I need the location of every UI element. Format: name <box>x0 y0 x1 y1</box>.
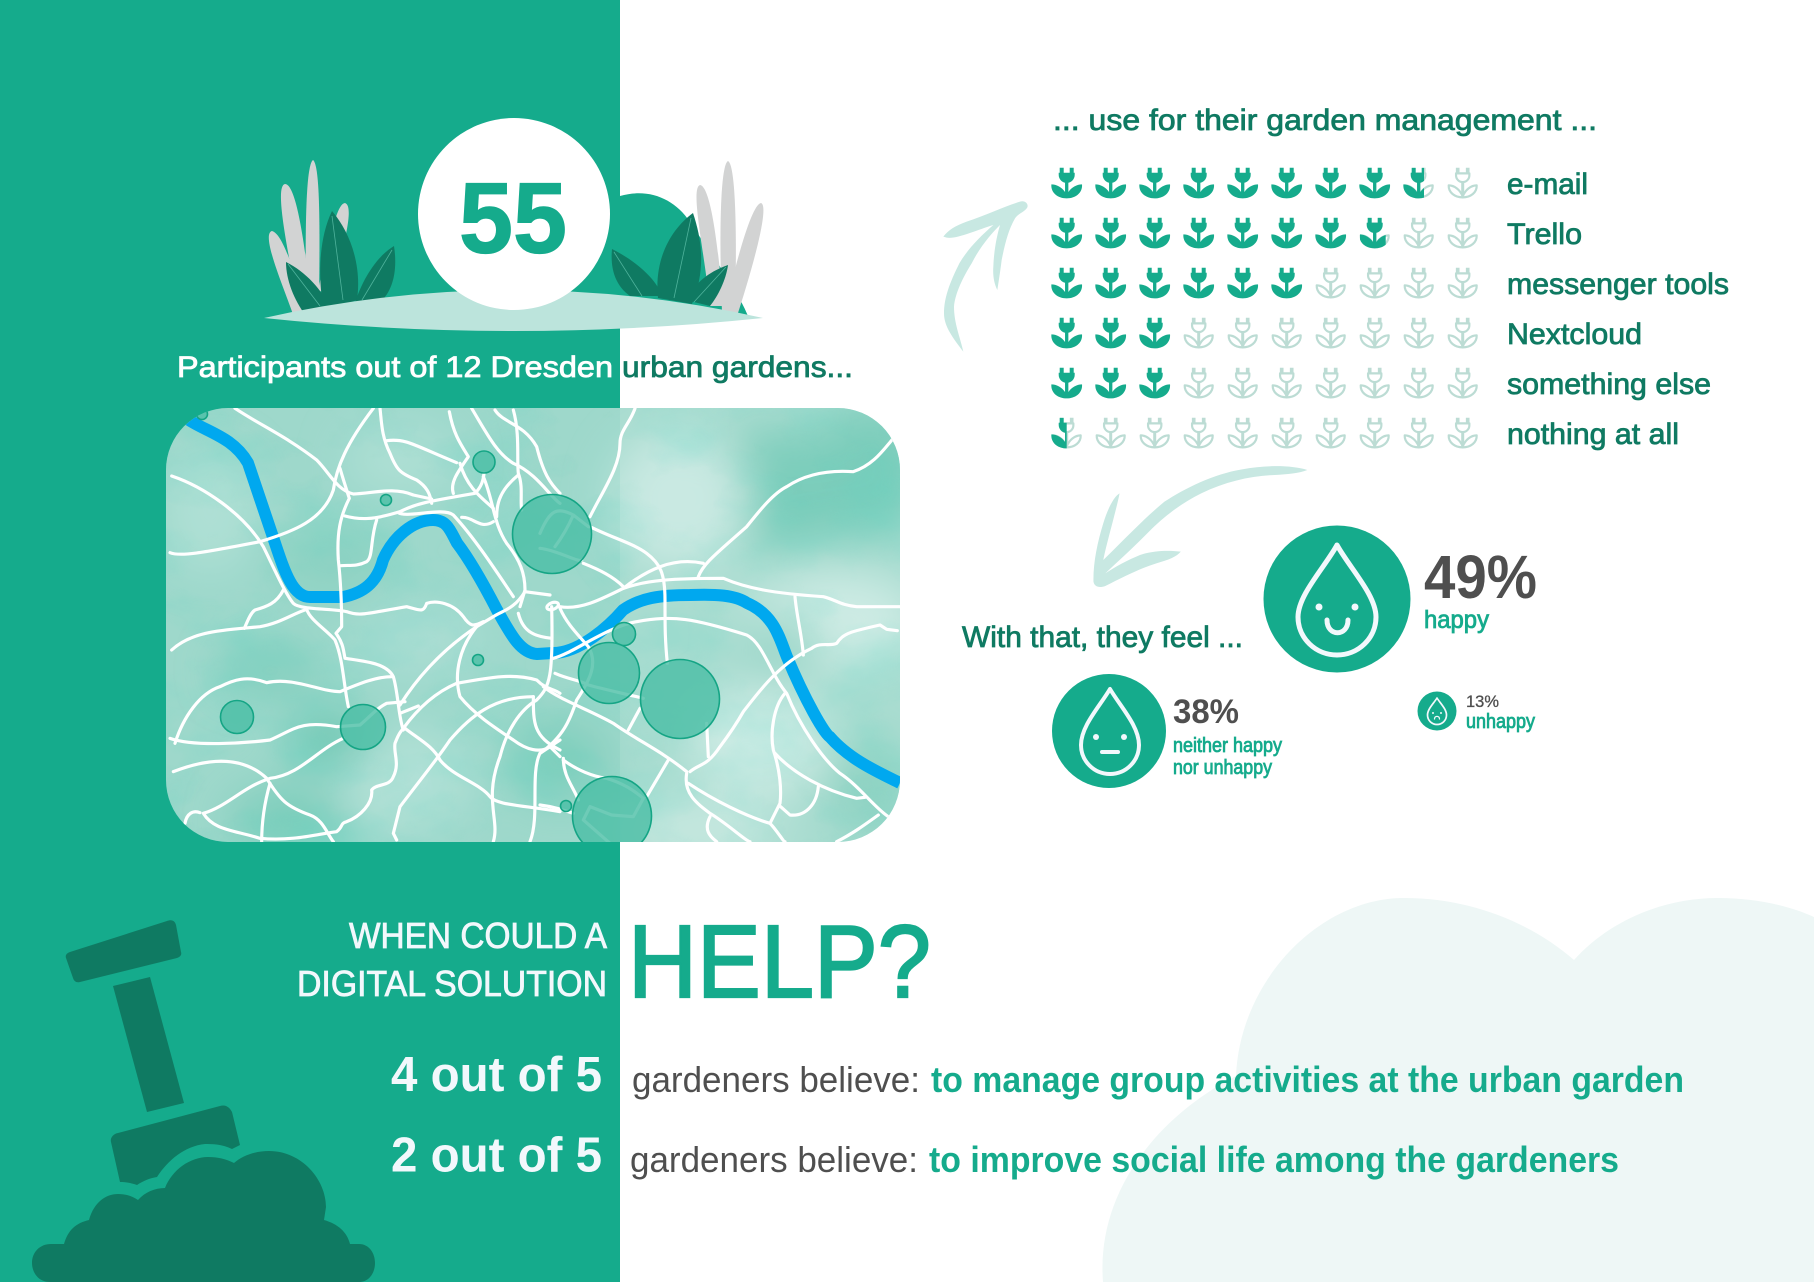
pictogram row: nothing at all <box>1051 418 1477 448</box>
unhappy statistic: unhappy <box>1466 711 1535 733</box>
arrow: up towards tools <box>943 201 1028 352</box>
map of Dresden <box>165 400 930 860</box>
happy statistic: 49% <box>1424 543 1537 611</box>
title: when could a digital solution help: WHEN COULD A <box>349 915 607 956</box>
finding: social life: 2 out of 5 <box>391 1128 602 1182</box>
finding: social life: to improve social life among the gardeners <box>929 1139 1619 1180</box>
shovel blade <box>111 1105 240 1185</box>
pictogram row: something else <box>1051 368 1477 398</box>
finding: group activities: 4 out of 5 <box>391 1048 602 1102</box>
tool labels <box>1507 168 1729 451</box>
pictogram row: e-mail <box>1051 168 1477 198</box>
background cloud shape <box>1102 898 1814 1282</box>
shovel grip <box>66 920 181 982</box>
roads west <box>170 408 560 842</box>
unhappy statistic: 13% <box>1466 692 1499 711</box>
arrow: down towards feelings <box>1093 466 1307 587</box>
finding: group activities: gardeners believe: <box>632 1059 920 1100</box>
panel: green left column <box>0 0 620 1282</box>
illustration: plants and participant badge <box>264 118 763 331</box>
heading: participants: Participants out of 12 Dresden <box>177 351 613 384</box>
title: when could a digital solution help <box>297 904 931 1019</box>
tool labels: something else <box>1507 368 1711 401</box>
tool labels: Nextcloud <box>1507 318 1642 351</box>
finding: social life <box>391 1128 1619 1182</box>
garden location circles <box>196 408 720 856</box>
ground <box>264 290 763 331</box>
heading: tools: ... use for their garden management ... <box>1053 104 1597 137</box>
neutral statistic <box>1173 693 1282 779</box>
hill behind badge <box>620 193 748 316</box>
unhappy statistic <box>1466 692 1535 733</box>
title: when could a digital solution help: HELP? <box>628 904 931 1019</box>
finding: social life: gardeners believe: <box>630 1139 918 1180</box>
finding: group activities <box>391 1048 1684 1102</box>
dark leaves right <box>612 213 728 306</box>
pictogram row: messenger tools <box>1051 268 1477 298</box>
title: when could a digital solution help: DIGITAL SOLUTION <box>297 963 607 1004</box>
badge circle <box>418 118 610 310</box>
finding: group activities: to manage group activities at the urban garden <box>931 1059 1684 1100</box>
grey leaves right <box>696 161 763 316</box>
happy drop icon <box>1264 526 1410 672</box>
neutral statistic: neither happy <box>1173 735 1282 757</box>
heading: participants <box>177 351 853 384</box>
unhappy drop icon <box>1418 692 1456 730</box>
tool labels: e-mail <box>1507 168 1588 201</box>
neutral statistic: 38% <box>1173 693 1239 731</box>
heading: participants: urban gardens... <box>622 351 853 384</box>
map watercolor background <box>165 400 930 860</box>
tool labels: messenger tools <box>1507 268 1729 301</box>
dark leaves left <box>286 211 395 316</box>
heading: feelings: With that, they feel ... <box>962 621 1243 654</box>
happy statistic: happy <box>1424 606 1489 634</box>
shovel shaft <box>113 977 184 1112</box>
river Elbe <box>189 420 900 783</box>
leaf veins <box>288 216 726 306</box>
roads east <box>540 408 900 843</box>
icon: shovel in soil <box>32 920 375 1282</box>
pictogram row: Trello <box>1051 218 1477 248</box>
tool labels: nothing at all <box>1507 418 1679 451</box>
tool labels: Trello <box>1507 218 1582 251</box>
pictogram row: Nextcloud <box>1051 318 1477 348</box>
neutral statistic: nor unhappy <box>1173 757 1272 779</box>
grey leaves left <box>269 160 349 320</box>
soil mound <box>32 1151 375 1282</box>
neutral drop icon <box>1052 674 1166 788</box>
participant number: 55 <box>459 162 567 274</box>
